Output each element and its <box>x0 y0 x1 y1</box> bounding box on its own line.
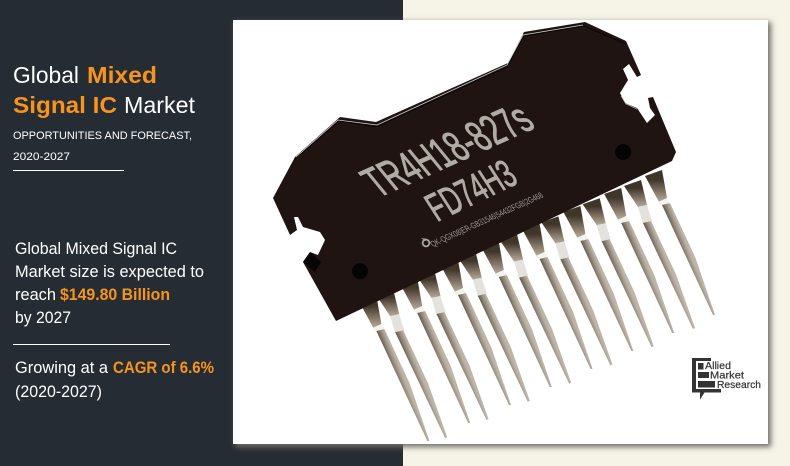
mounting hole: right <box>615 144 631 160</box>
title: Mixed <box>87 62 157 88</box>
text block: market size: Global Mixed Signal IC <box>15 240 177 258</box>
text block: market size: Market size is expected to <box>15 263 204 281</box>
text block: market size: by 2027 <box>15 309 71 327</box>
subtitle: 2020-2027 <box>13 151 70 163</box>
chip marking: code: FD74H3 <box>417 151 525 230</box>
panel: dark left sidebar <box>0 0 403 466</box>
logo text <box>705 360 761 391</box>
chip pins <box>359 170 715 441</box>
text block: CAGR <box>15 359 214 401</box>
logo text: Research <box>717 379 761 391</box>
text block: market size <box>15 240 204 327</box>
panel: white image card <box>233 20 768 444</box>
text block: CAGR: Growing at a <box>15 359 109 377</box>
subtitle: OPPORTUNITIES AND FORECAST, <box>13 130 192 142</box>
title <box>13 62 196 118</box>
text block: market size: $149.80 Billion <box>60 286 170 304</box>
logo icon <box>692 358 721 400</box>
chip marking: serial line: QK-QGX08|ER-GB31546|54432FGB|2G468 <box>428 191 545 249</box>
text block: CAGR: (2020-2027) <box>15 383 102 401</box>
logo: Allied Market Research <box>692 358 761 400</box>
chip body <box>273 22 676 321</box>
mounting hole: left <box>352 263 368 279</box>
title: Signal IC <box>13 92 117 118</box>
chip mounting tab: left <box>303 252 321 272</box>
chip notch highlight: right <box>621 96 637 109</box>
title: Market <box>124 92 196 118</box>
chip marking: part number: TR4H18-827s <box>351 95 543 206</box>
panel shadow <box>235 22 771 447</box>
logo text: Market <box>710 370 744 382</box>
title: Global <box>13 62 79 88</box>
text block: CAGR: CAGR of 6.6% <box>113 359 214 377</box>
logo text: Allied <box>705 360 731 372</box>
page background: cream right side <box>403 0 790 466</box>
chip marking: swirl logo <box>421 238 429 246</box>
text block: market size: reach <box>15 286 56 304</box>
subtitle <box>13 130 192 163</box>
